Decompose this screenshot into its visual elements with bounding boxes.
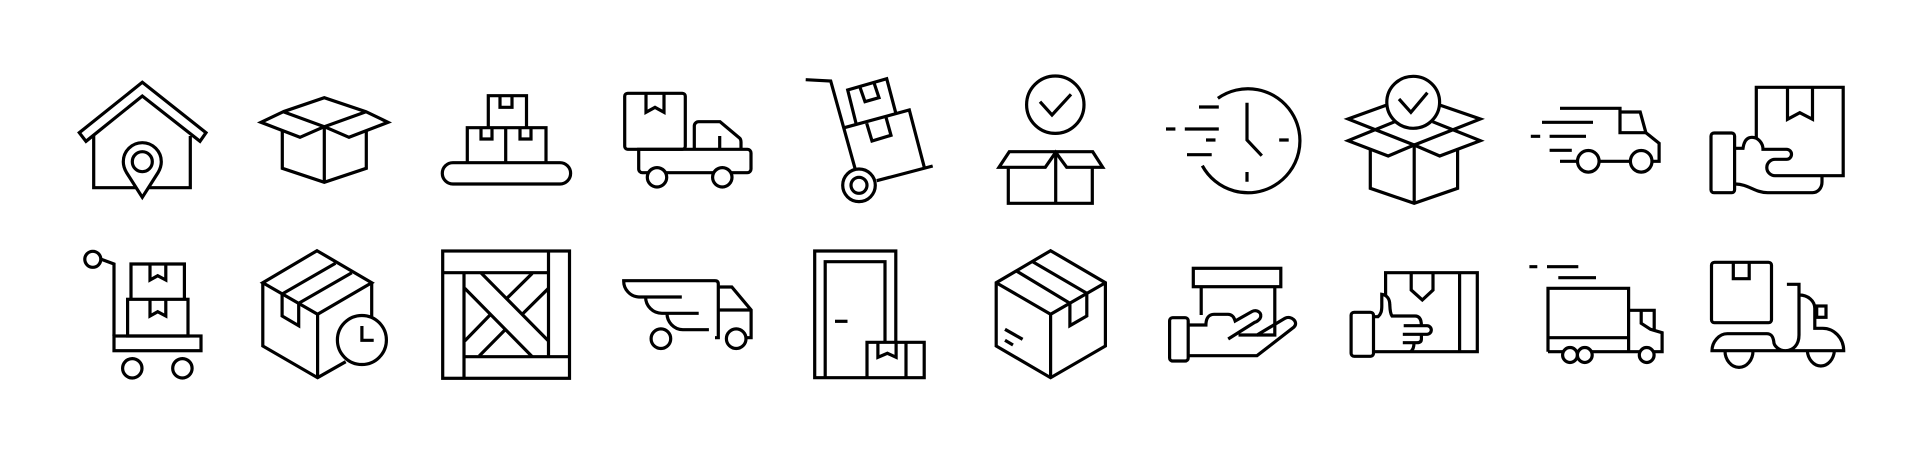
icon: open box <box>261 98 388 182</box>
icon: hand holding box <box>1711 87 1843 193</box>
icon: cart with stacked boxes <box>85 251 201 378</box>
icon: house with location pin <box>79 82 206 197</box>
icon: delivery scooter <box>1712 262 1844 367</box>
icon: pickup truck with box <box>625 93 751 187</box>
icon: winged delivery truck <box>624 281 751 349</box>
icon: hand truck with boxes <box>806 79 933 202</box>
icon: open box with check mark <box>999 76 1103 203</box>
icon: hand holding box <box>1170 268 1296 361</box>
icon: delivery box truck <box>1529 267 1662 362</box>
icon: open box with check badge <box>1348 76 1480 203</box>
icon: door with parcel <box>815 251 924 378</box>
icon: fast delivery van <box>1531 108 1659 172</box>
icon: boxes on conveyor <box>442 96 571 184</box>
icon: thumb up with box <box>1351 273 1477 356</box>
icon: fast clock <box>1166 89 1300 193</box>
icon: box with clock <box>263 251 386 378</box>
icon: sealed cardboard box <box>996 251 1105 378</box>
icon: wooden crate <box>443 251 570 378</box>
